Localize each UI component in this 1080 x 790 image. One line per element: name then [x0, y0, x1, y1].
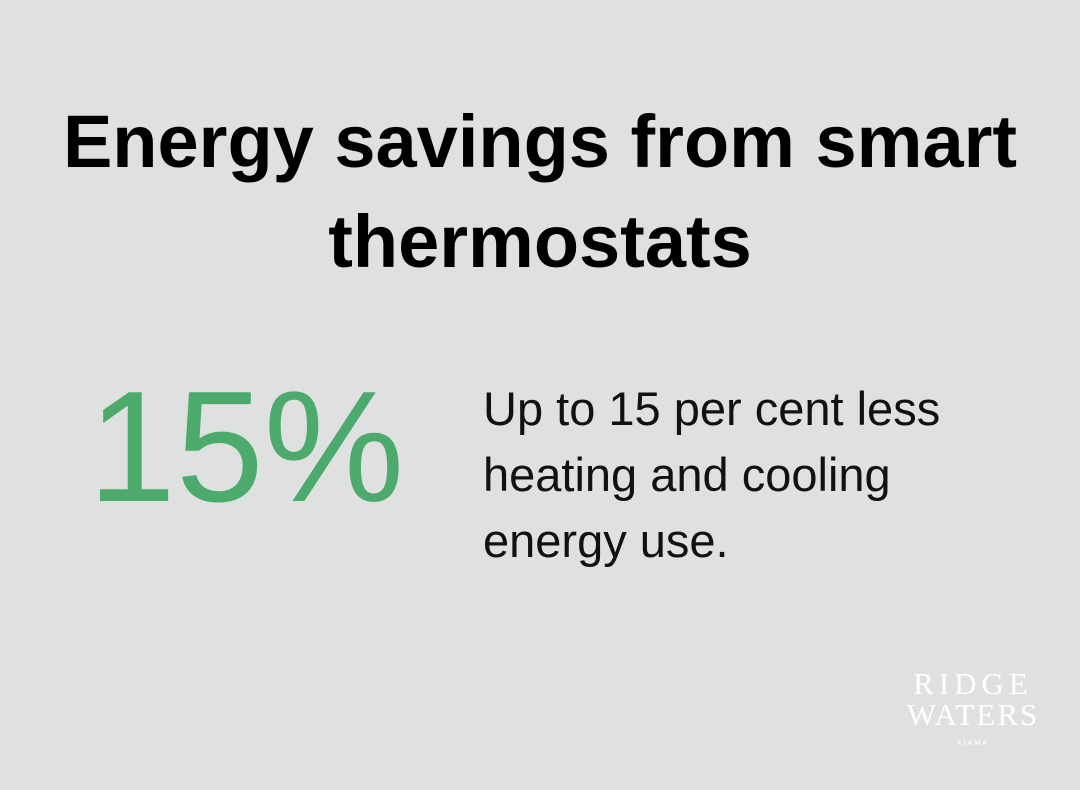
title: thermostats — [328, 200, 752, 283]
description: Up to 15 per cent less — [483, 382, 940, 435]
logo — [906, 666, 1039, 747]
title: Energy savings from smart — [63, 100, 1017, 183]
description — [483, 382, 940, 567]
logo: RIDGE — [913, 666, 1033, 701]
description: heating and cooling — [483, 448, 891, 501]
title — [63, 100, 1017, 283]
description: energy use. — [483, 514, 729, 567]
logo: KIAMA — [957, 740, 989, 747]
logo: WATERS — [907, 697, 1039, 732]
big stat: 15% — [88, 359, 404, 535]
